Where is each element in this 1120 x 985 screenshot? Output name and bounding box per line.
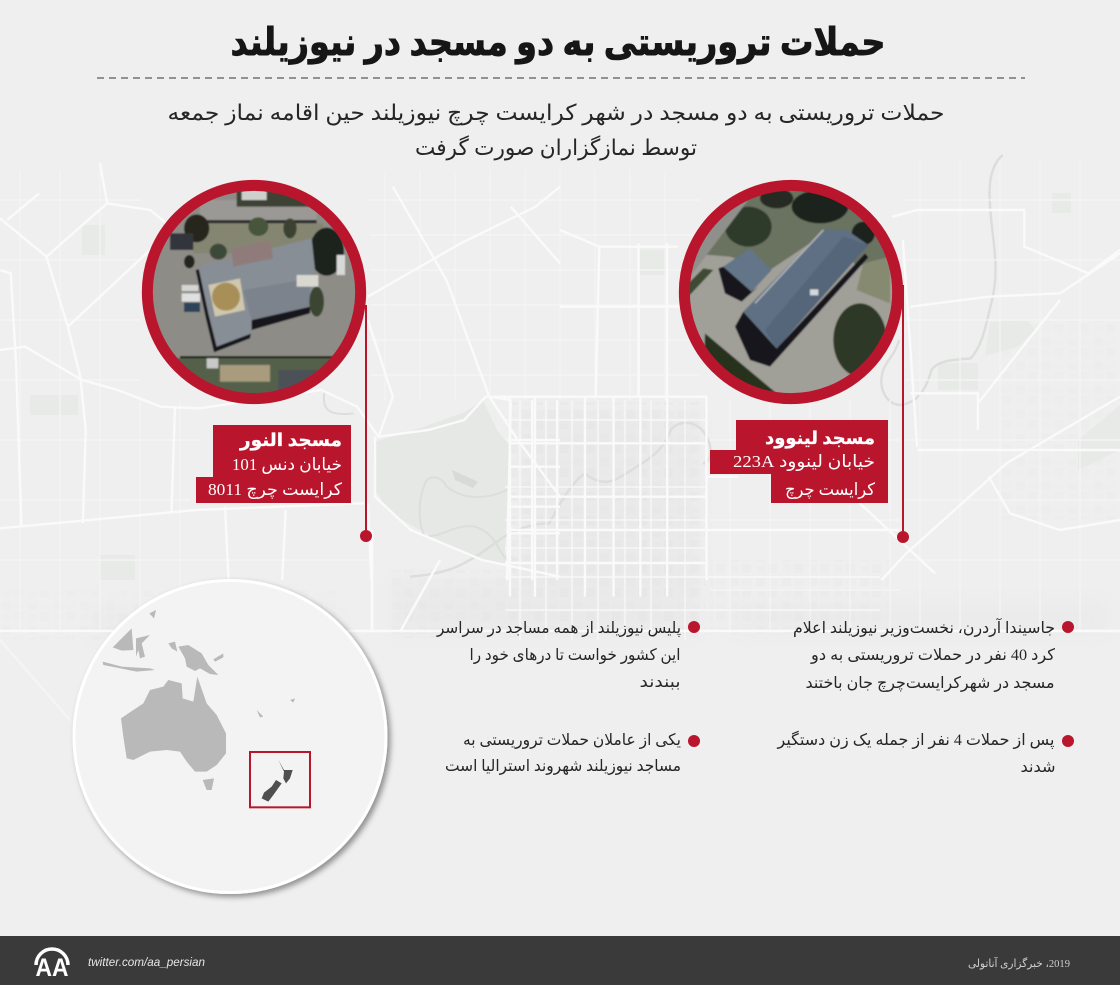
park (373, 400, 520, 565)
photo: Linwood mosque (684, 185, 898, 400)
roads: west side (0, 163, 560, 580)
map: New Zealand (262, 760, 293, 802)
subtitle: حملات تروریستی به دو مسجد در شهر کرایست چرچ نیوزیلند حین اقامه نماز جمعه (168, 100, 944, 125)
label: Al Noor mosque: مسجد النور (239, 430, 342, 451)
bullet group: middle column (436, 620, 700, 776)
bullet group: middle column: ببندند (640, 674, 680, 691)
bullet group: right column: شدند (1020, 759, 1056, 776)
map: highlight box (250, 752, 310, 807)
label: Linwood mosque: کرایست چرچ (785, 480, 876, 500)
thin minor streets (0, 160, 1120, 630)
logo: Anadolu Agency: AA (36, 954, 68, 982)
dashed divider (97, 77, 1025, 79)
label: Linwood mosque (710, 420, 888, 503)
footer link: twitter.com/aa_persian (88, 955, 205, 969)
bullet group: middle column: این کشور خواست تا درهای خود را (470, 647, 680, 665)
photo: Al Noor mosque (147, 185, 361, 402)
label: Al Noor mosque: کرایست چرچ 8011 (208, 480, 343, 500)
label: Linwood mosque: مسجد لینوود (765, 428, 875, 449)
map: Australia and nearby islands (103, 610, 295, 790)
bullet group: middle column: مساجد نیوزیلند شهروند استرالیا است (445, 758, 681, 776)
bullet group: middle column: یکی از عاملان حملات تروریستی به (463, 732, 681, 750)
footer bar (0, 936, 1120, 985)
subtitle: توسط نمازگزاران صورت گرفت (415, 135, 697, 160)
footer credit: 2019، خبرگزاری آناتولی (968, 956, 1070, 970)
label: Linwood mosque: خیابان لینوود 223A (733, 452, 875, 471)
bullet group: right column (777, 618, 1074, 776)
label: Al Noor mosque (196, 425, 351, 503)
connector line: Al Noor (360, 305, 372, 542)
connector line: Linwood (897, 285, 909, 543)
label: Al Noor mosque: خیابان دنس 101 (232, 455, 342, 474)
locator globe map (74, 580, 386, 892)
roads: central and east side (510, 210, 1120, 597)
bullet group: right column: مسجد در شهرکرایست‌چرچ جان باختند (806, 675, 1054, 693)
title: حملات تروریستی به دو مسجد در نیوزیلند (230, 22, 886, 65)
bullet group: right column: کرد 40 نفر در حملات تروریستی به دو (810, 647, 1055, 665)
bullet group: right column: پس از حملات 4 نفر از جمله یک زن دستگیر (777, 730, 1054, 750)
bullet group: middle column: پلیس نیوزیلند از همه مساجد در سراسر (436, 620, 681, 638)
river (410, 155, 1003, 577)
subtitle (168, 100, 944, 160)
bullet group: right column: جاسیندا آردرن، نخست‌وزیر نیوزیلند اعلام (793, 618, 1055, 638)
